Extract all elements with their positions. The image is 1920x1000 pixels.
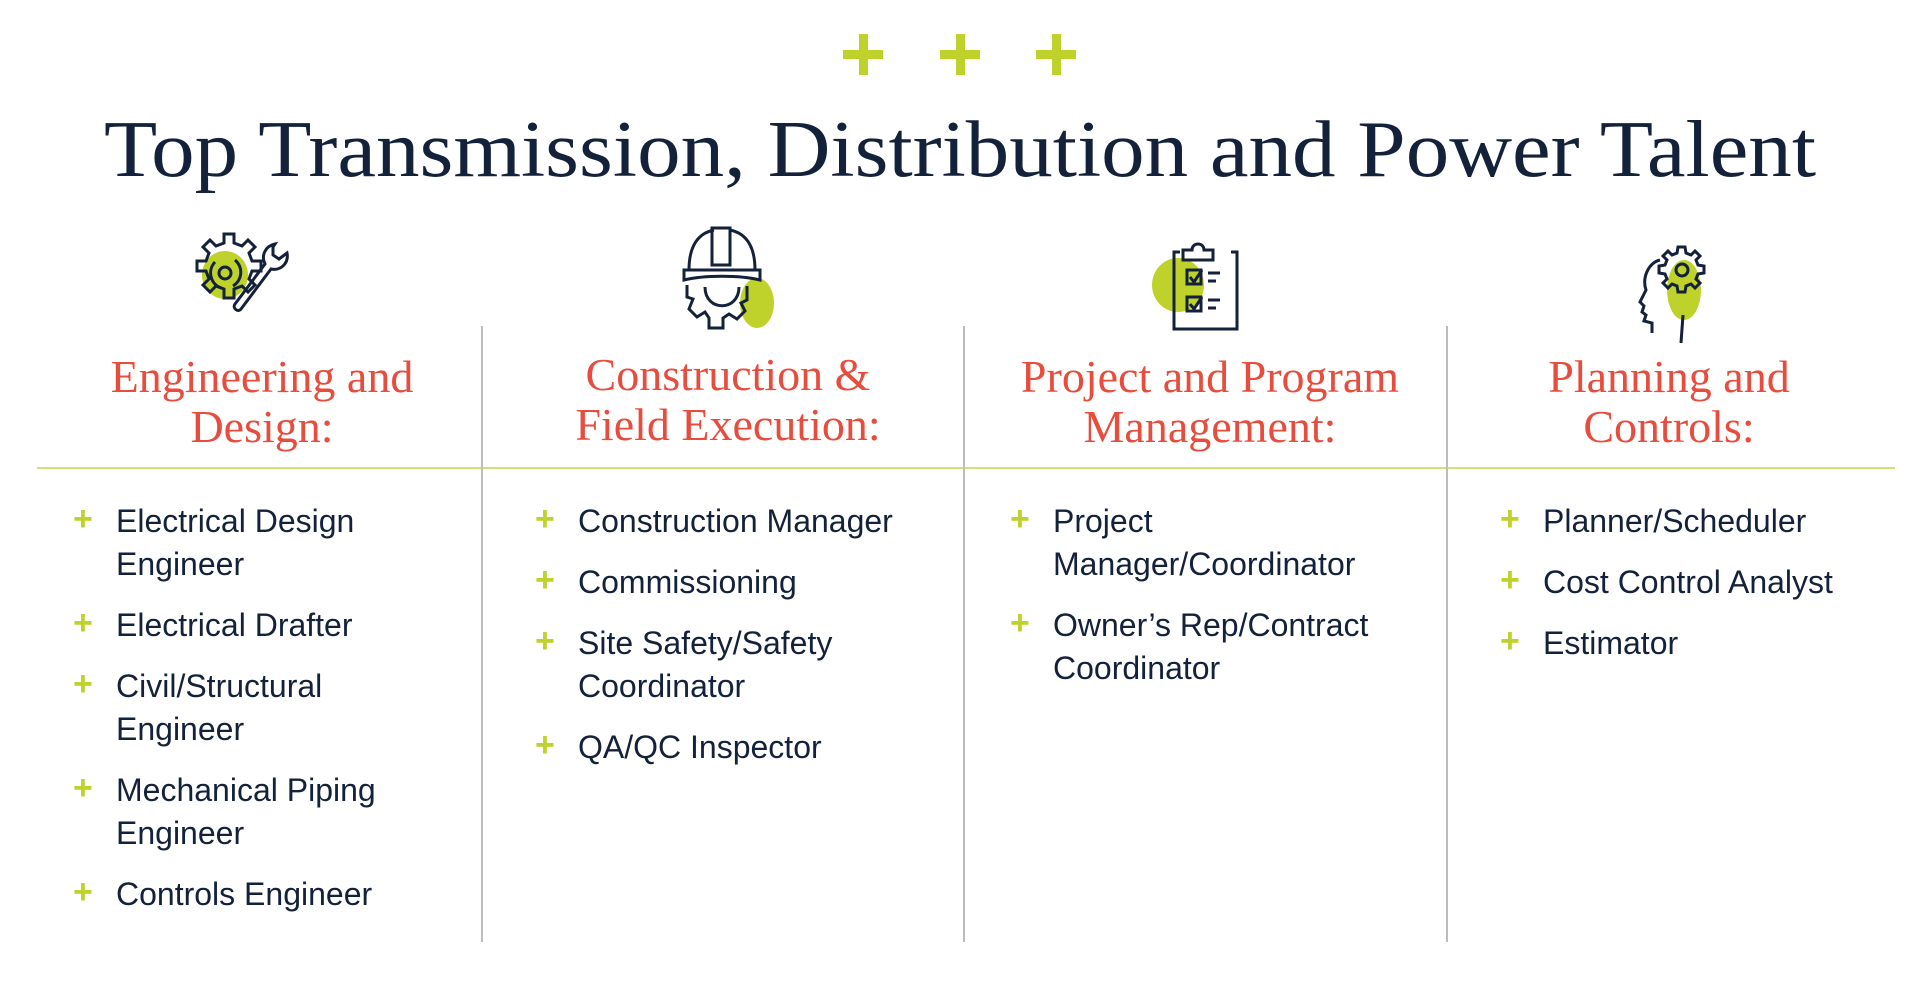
heading: Planning and Controls (1548, 351, 1790, 452)
heading: Project and Program Management: Project and Program (1021, 351, 1399, 402)
list: engineering: Engineer (116, 815, 244, 851)
text: + (535, 726, 555, 764)
list: project management: Manager/Coordinator (1053, 546, 1355, 582)
heading: Project and Program Management: Management: (1084, 401, 1336, 452)
list: engineering: Controls Engineer (116, 876, 372, 912)
list: project management: Owner’s Rep/Contract (1053, 607, 1368, 643)
list: planning (1500, 500, 1833, 661)
text: + (1010, 500, 1030, 538)
list: engineering: Engineer (116, 711, 244, 747)
title: Top Transmission, Distribution and Power Talent (104, 106, 1816, 194)
list: construction: Coordinator (578, 668, 745, 704)
list: planning: Cost Control Analyst (1543, 564, 1833, 600)
heading: Planning and Controls: Controls: (1583, 401, 1755, 452)
list: engineering: Electrical Drafter (116, 607, 352, 643)
text: + (73, 500, 93, 538)
icon: hard hat with gear (682, 226, 774, 330)
list: construction: Site Safety/Safety (578, 625, 832, 661)
decorative plus signs (843, 34, 1076, 75)
list: planning: Planner/Scheduler (1543, 503, 1806, 539)
heading: Construction & Field Execution: Field Execution: (575, 399, 881, 450)
icon: head with gear (1638, 246, 1706, 344)
text: + (73, 604, 93, 642)
list: engineering: Civil/Structural (116, 668, 322, 704)
list: engineering: Electrical Design (116, 503, 354, 539)
list: engineering (73, 500, 376, 912)
text: + (1500, 622, 1520, 660)
icon: clipboard checklist (1152, 242, 1238, 330)
text: + (535, 561, 555, 599)
green horizontal divider (37, 467, 1895, 469)
list: construction (535, 500, 893, 765)
heading: Construction & Field Execution (575, 349, 881, 450)
text: + (1010, 604, 1030, 642)
list: construction: QA/QC Inspector (578, 729, 822, 765)
text: + (73, 665, 93, 703)
heading: Engineering and Design: Engineering and (111, 351, 413, 402)
text: + (535, 622, 555, 660)
list: construction: Commissioning (578, 564, 797, 600)
icon: gear and wrench (196, 232, 289, 312)
list: engineering: Mechanical Piping (116, 772, 376, 808)
text: + (73, 873, 93, 911)
heading: Construction & Field Execution: Construction & (586, 349, 870, 400)
text: + (535, 500, 555, 538)
list: project management: Project (1053, 503, 1153, 539)
list: project management: Coordinator (1053, 650, 1220, 686)
list: planning: Estimator (1543, 625, 1678, 661)
text: + (73, 769, 93, 807)
list: engineering: Engineer (116, 546, 244, 582)
heading: Planning and Controls: Planning and (1548, 351, 1790, 402)
list: construction: Construction Manager (578, 503, 893, 539)
text: + (1500, 561, 1520, 599)
list: project management (1010, 500, 1368, 686)
heading: Project and Program Management (1021, 351, 1399, 452)
text: + (1500, 500, 1520, 538)
heading: Engineering and Design: Design: (190, 401, 334, 452)
heading: Engineering and Design (111, 351, 413, 452)
